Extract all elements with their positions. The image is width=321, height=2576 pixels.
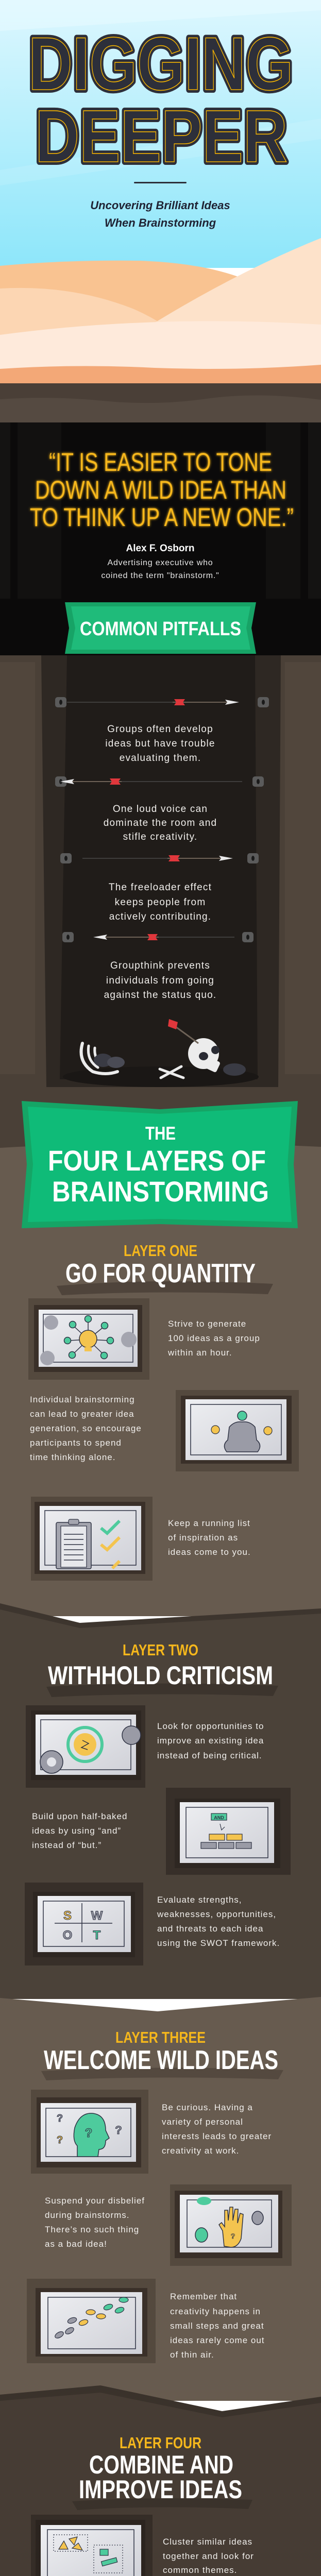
- panel: improve idea gears: [26, 1705, 145, 1788]
- text: look for opportunities: Look for opportunities to: [157, 1721, 264, 1731]
- heading: layer four: COMBINE AND: [89, 2450, 233, 2479]
- text: remember creativity: [170, 2292, 265, 2360]
- panel: curious head: ?: [57, 2113, 63, 2124]
- dunes: [0, 238, 321, 384]
- panel: idea network: [28, 1298, 149, 1380]
- text: individual brainstorming: [30, 1395, 142, 1462]
- text: build upon half-baked: Build upon half-baked: [32, 1811, 127, 1821]
- heading: layer four: LAYER FOUR: [120, 2434, 201, 2452]
- heading: layer three: LAYER THREE: [115, 2028, 206, 2046]
- layer one background: [0, 1142, 321, 1616]
- panel: SWOT: O: [63, 1928, 72, 1942]
- subtitle: When Brainstorming: [105, 216, 216, 229]
- panel: curious head: ?: [115, 2124, 122, 2137]
- heading: layer four: [72, 2434, 252, 2510]
- text: running list: Keep a running list: [168, 1518, 250, 1528]
- arrow 4: [62, 932, 254, 942]
- panel: curious head: ?: [57, 2134, 63, 2146]
- pitfall text 2: dominate the room and: [104, 818, 217, 828]
- ground top band: [0, 383, 321, 423]
- pitfall text 1: Groups often develop: [107, 724, 213, 735]
- text: cluster similar: [163, 2537, 254, 2575]
- pitfall text 3: actively contributing.: [109, 911, 211, 922]
- text: look for opportunities: instead of being critical.: [157, 1751, 262, 1760]
- arrow 3: [60, 853, 259, 863]
- subtitle: [90, 199, 230, 229]
- quote attribution: coined the term "brainstorm.": [101, 571, 219, 580]
- banner: the four layers of brainstorming: THE: [145, 1123, 176, 1144]
- shaft walls: [0, 655, 321, 1145]
- text: remember creativity: creativity happens in: [170, 2307, 261, 2316]
- layer two background: [0, 1603, 321, 1999]
- quote attribution: Advertising executive who: [108, 558, 213, 567]
- text: cluster similar: common themes.: [163, 2565, 237, 2575]
- banner: the four layers of brainstorming: [22, 1101, 298, 1228]
- text: running list: ideas come to you.: [168, 1547, 251, 1557]
- text: evaluate SWOT: Evaluate strengths,: [157, 1895, 242, 1905]
- heading: layer one: GO FOR QUANTITY: [65, 1259, 256, 1289]
- title: Digging Deeper: [28, 22, 293, 178]
- text: be curious: Be curious. Having a: [162, 2103, 253, 2112]
- text: suspend disbelief: during brainstorms.: [45, 2210, 130, 2220]
- pitfall text 3: [109, 882, 212, 922]
- text: be curious: interests leads to greater: [162, 2131, 272, 2141]
- pitfall text 4: Groupthink prevents: [110, 960, 210, 971]
- quote: [30, 448, 294, 532]
- heading: layer four: IMPROVE IDEAS: [79, 2475, 242, 2504]
- pitfall text 2: One loud voice can: [113, 804, 208, 815]
- text: individual brainstorming: time thinking alone.: [30, 1452, 115, 1462]
- text: remember creativity: small steps and great: [170, 2321, 264, 2331]
- text: build upon half-baked: [32, 1811, 127, 1850]
- heading: layer three: [41, 2028, 283, 2080]
- pitfall text 4: against the status quo.: [104, 990, 216, 1001]
- text: remember creativity: Remember that: [170, 2292, 237, 2301]
- panel: cluster shapes: [31, 2515, 153, 2576]
- panel: and bricks: AND: [214, 1815, 224, 1820]
- subtitle: Uncovering Brilliant Ideas: [90, 199, 230, 212]
- pitfall text 2: stifle creativity.: [123, 832, 197, 842]
- banner: common pitfalls: [65, 602, 256, 654]
- text: remember creativity: ideas rarely come out: [170, 2335, 265, 2345]
- quote attribution: Alex F. Osborn: [126, 543, 195, 554]
- panel: SWOT: S: [63, 1909, 72, 1923]
- pitfall text 1: [105, 724, 215, 764]
- pitfall text 1: ideas but have trouble: [105, 738, 215, 749]
- text: be curious: creativity at work.: [162, 2146, 239, 2156]
- quote panel background: [0, 422, 321, 655]
- text: individual brainstorming: generation, so encourage: [30, 1423, 142, 1433]
- sky background: [0, 0, 321, 268]
- divider under title: [134, 182, 187, 183]
- heading: layer two: [46, 1641, 278, 1697]
- text: suspend disbelief: Suspend your disbelief: [45, 2196, 145, 2206]
- text: build upon half-baked: ideas by using “and”: [32, 1826, 121, 1836]
- pitfall text 3: keeps people from: [115, 897, 206, 908]
- text: look for opportunities: improve an existing idea: [157, 1736, 264, 1745]
- text: individual brainstorming: can lead to greater idea: [30, 1409, 134, 1419]
- banner: the four layers of brainstorming: BRAINSTORMING: [52, 1175, 269, 1208]
- panel: clipboard checklist: [31, 1497, 153, 1581]
- pitfall text 4: individuals from going: [106, 975, 214, 986]
- arrow 2: [55, 776, 264, 787]
- panel: curious head: ?: [85, 2126, 92, 2140]
- heading: layer one: LAYER ONE: [124, 1242, 197, 1260]
- pitfall text 2: [104, 804, 217, 842]
- pitfall text 3: The freeloader effect: [109, 882, 212, 893]
- panel: SWOT: T: [93, 1928, 101, 1942]
- text: evaluate SWOT: and threats to each idea: [157, 1924, 263, 1934]
- banner: the four layers of brainstorming: FOUR LAYERS OF: [48, 1144, 266, 1177]
- text: strive to generate: 100 ideas as a group: [168, 1333, 260, 1343]
- text: individual brainstorming: participants to spend: [30, 1438, 122, 1448]
- panel: raised hands: ?: [231, 2232, 235, 2240]
- text: suspend disbelief: as a bad idea!: [45, 2239, 107, 2249]
- text: evaluate SWOT: using the SWOT framework.: [157, 1938, 280, 1948]
- heading: layer one: [57, 1242, 273, 1295]
- panel: SWOT: W: [91, 1909, 103, 1923]
- arrow 1: [55, 697, 269, 707]
- panel: SWOT: [25, 1883, 143, 1965]
- text: suspend disbelief: [45, 2196, 145, 2249]
- text: evaluate SWOT: weaknesses, opportunities,: [157, 1909, 276, 1919]
- layer four background: [0, 2385, 321, 2576]
- text: cluster similar: Cluster similar ideas: [163, 2537, 252, 2547]
- panel: meditating person: [176, 1390, 299, 1471]
- text: cluster similar: together and look for: [163, 2551, 254, 2561]
- text: be curious: [162, 2103, 272, 2156]
- text: look for opportunities: [157, 1721, 264, 1760]
- banner: common pitfalls: COMMON PITFALLS: [80, 618, 241, 640]
- text: strive to generate: within an hour.: [167, 1348, 232, 1358]
- panel: raised hands: [170, 2184, 292, 2266]
- text: running list: [168, 1518, 251, 1557]
- icon: skeleton bones: [81, 1019, 246, 1078]
- panel: footsteps: [27, 2279, 156, 2363]
- layer three background: [0, 1997, 321, 2401]
- text: individual brainstorming: Individual brainstorming: [30, 1395, 135, 1404]
- heading: layer two: WITHHOLD CRITICISM: [48, 1661, 273, 1690]
- heading: layer two: LAYER TWO: [123, 1641, 198, 1659]
- text: strive to generate: [167, 1319, 260, 1358]
- text: build upon half-baked: instead of “but.”: [32, 1840, 102, 1850]
- text: evaluate SWOT: [157, 1895, 280, 1948]
- text: running list: of inspiration as: [168, 1533, 238, 1543]
- text: remember creativity: of thin air.: [170, 2350, 214, 2360]
- text: suspend disbelief: There’s no such thing: [45, 2225, 139, 2234]
- panel: curious head: [31, 2090, 148, 2174]
- text: be curious: variety of personal: [162, 2117, 243, 2127]
- quote attribution: [101, 543, 219, 580]
- pitfall text 4: [104, 960, 216, 1001]
- pitfall text 1: evaluating them.: [120, 753, 201, 764]
- panel: and bricks: [166, 1788, 291, 1875]
- text: strive to generate: Strive to generate: [168, 1319, 246, 1329]
